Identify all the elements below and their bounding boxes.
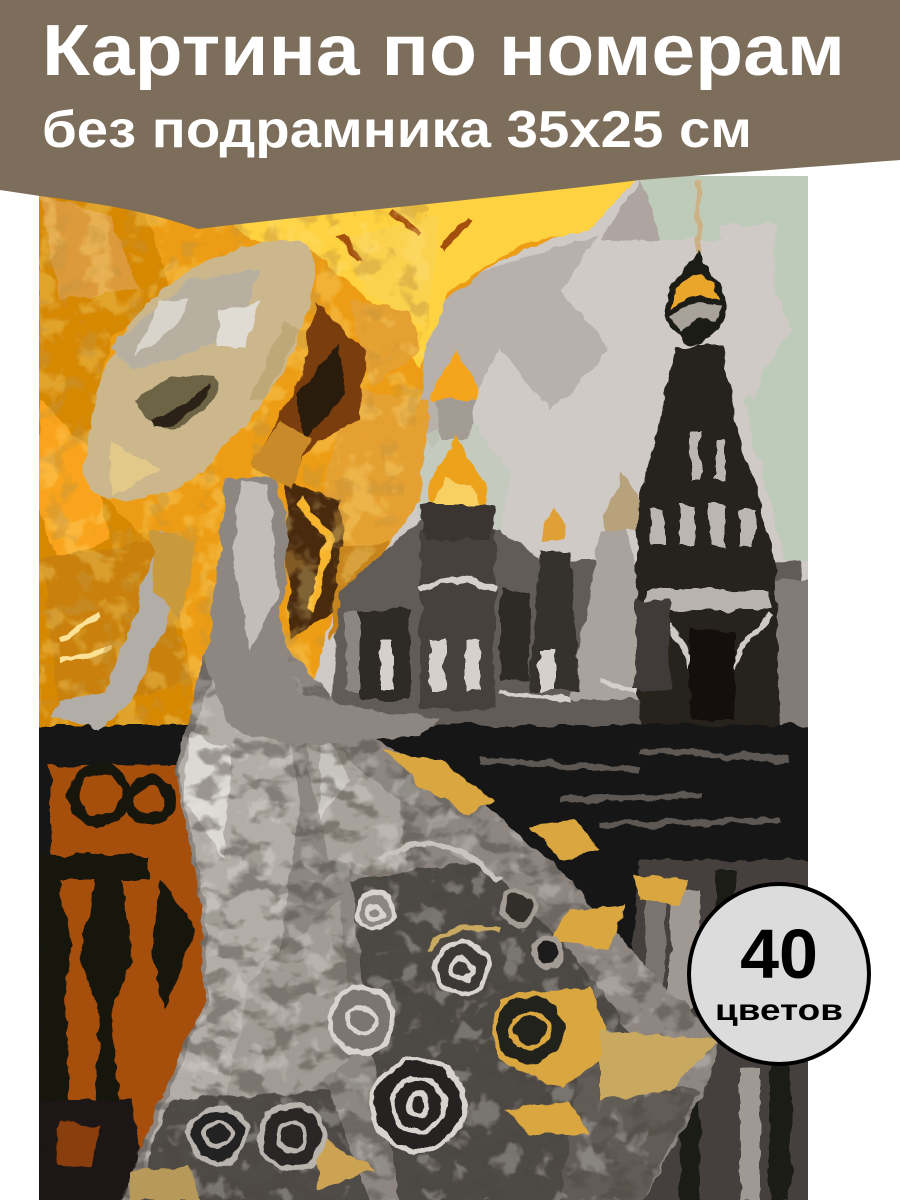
dress: golden leaves [130, 750, 720, 1200]
title: Картина по номерам [42, 11, 845, 91]
woman: torso [205, 475, 440, 745]
dress: roses [190, 844, 566, 1169]
main cathedral tower [635, 180, 780, 730]
balcony railing and dark band [30, 725, 820, 1200]
badge: 40 colours: 40 [740, 915, 818, 993]
sky [314, 176, 808, 698]
sun hat [85, 240, 314, 500]
header banner [0, 0, 900, 229]
cathedral background buildings [330, 520, 820, 730]
woman: arm [50, 530, 195, 728]
hair [250, 300, 365, 490]
woman: dress [120, 650, 720, 1200]
subtitle: без подрамника 35х25 см [42, 101, 752, 159]
golden domes [420, 350, 646, 540]
orange and yellow background [30, 170, 640, 736]
badge: 40 colours: цветов [715, 994, 843, 1027]
right columns [631, 858, 808, 1200]
badge: 40 colours [689, 884, 869, 1064]
painting: woman in hat overlooking cathedral [30, 170, 820, 1200]
